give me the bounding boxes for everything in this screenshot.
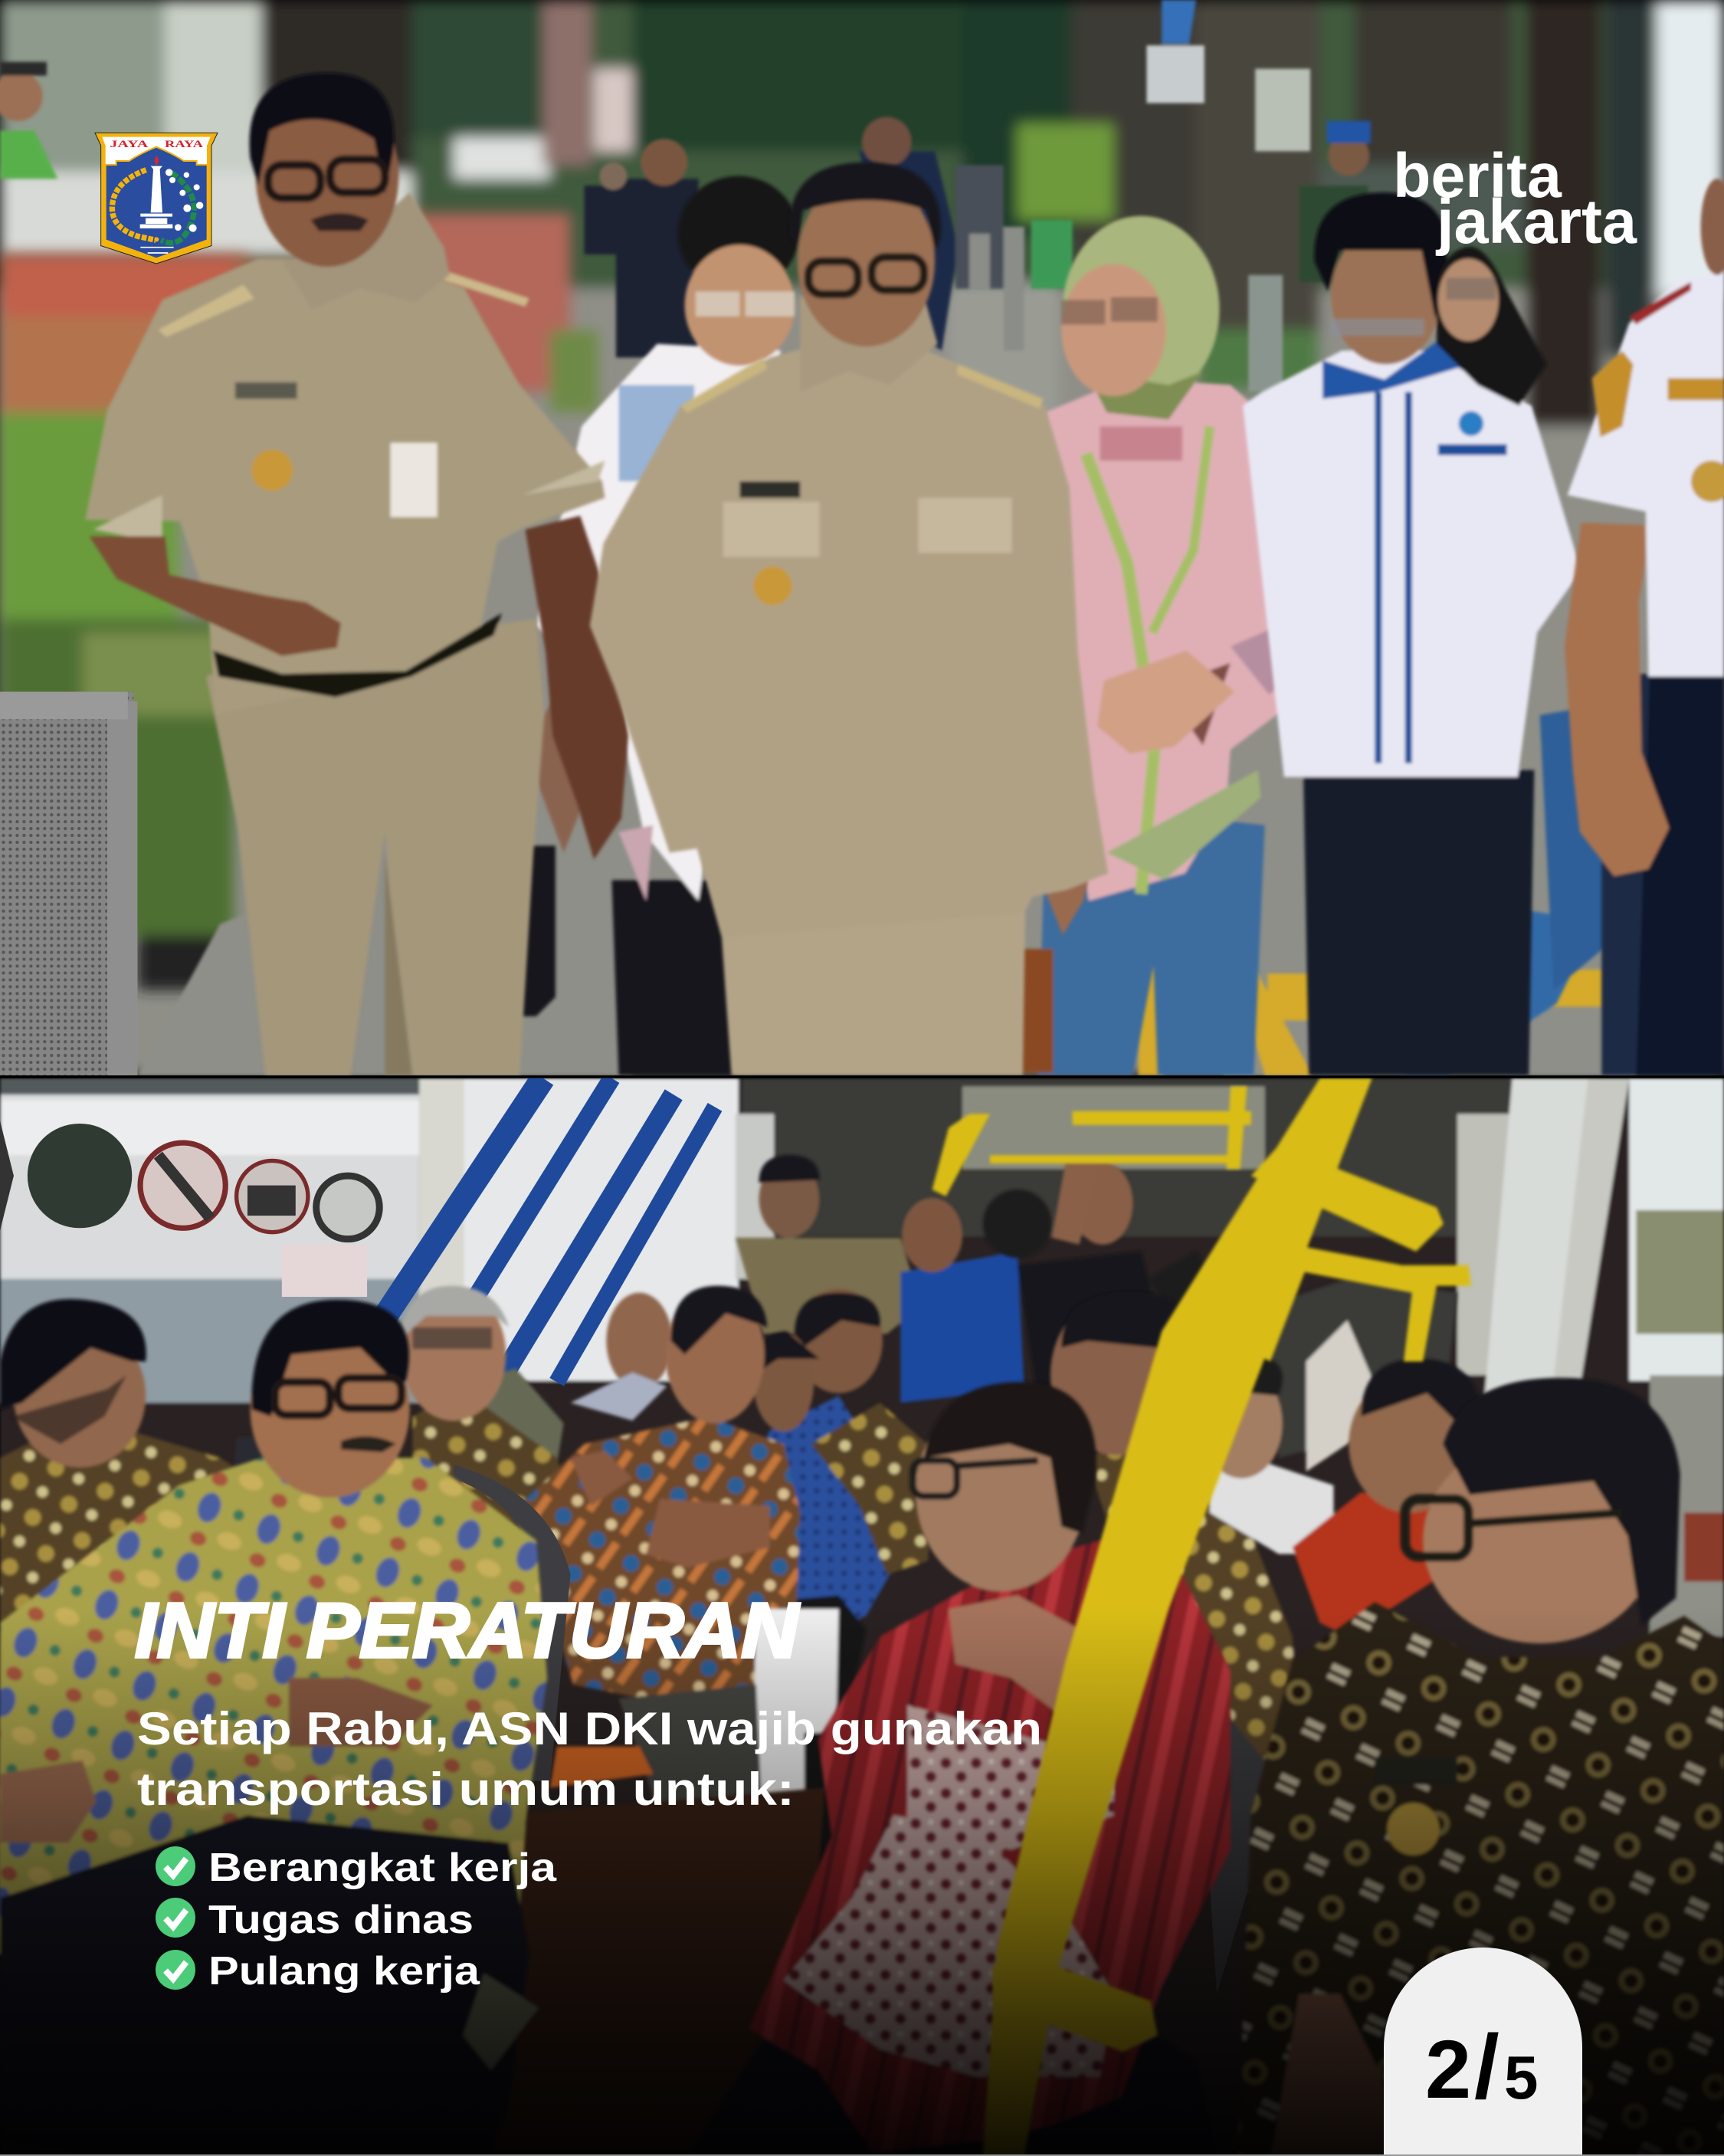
item: berangkat kerja: Berangkat kerja — [208, 1846, 557, 1890]
shield white top — [102, 137, 211, 173]
man in dark batik, right — [1237, 1378, 1724, 2156]
item: tugas dinas: Tugas dinas — [208, 1898, 474, 1942]
logo: berita jakarta wordmark: jakarta — [1435, 187, 1637, 257]
tactile yellow paving — [1136, 967, 1603, 1076]
logo: Jakarta coat of arms: RAYA — [165, 139, 204, 149]
background: hedge — [0, 213, 598, 990]
checklist — [156, 1846, 557, 1994]
page counter badge: 2 — [1425, 2023, 1471, 2115]
page counter badge — [1384, 1948, 1582, 2154]
bottom dark shade — [0, 1609, 1724, 2156]
blue diagonal window stripes — [378, 1078, 715, 1389]
monument — [140, 156, 172, 228]
man in white shirt — [1243, 192, 1581, 1075]
shield blue field — [106, 147, 208, 258]
man 1 in khaki uniform, left — [85, 73, 628, 1075]
woman in pink kebaya — [1012, 216, 1636, 1075]
pavement — [138, 916, 1637, 1076]
speaker box — [0, 692, 137, 1075]
prohibition pictograms — [0, 1121, 379, 1297]
yellow pole — [932, 1078, 1471, 2156]
intro text — [137, 1703, 1042, 1815]
panel: bottom photo inside the bus — [0, 1078, 1724, 2156]
bus seats — [454, 1465, 571, 1781]
batik passenger, center — [518, 1286, 935, 2076]
background: street and trees — [0, 0, 1724, 1075]
heading: INTI PERATURAN — [135, 1588, 800, 1674]
logo: berita jakarta wordmark: berita — [1393, 141, 1562, 211]
rice wreath — [112, 170, 156, 240]
background figures — [0, 0, 1371, 392]
woman in white blouse — [519, 176, 798, 1075]
logo: berita jakarta wordmark — [1393, 141, 1637, 257]
man in red shirt — [687, 1382, 1231, 2156]
motto: JAYA — [110, 139, 149, 149]
officer on the right — [1565, 179, 1724, 1075]
bus interior background — [0, 1078, 1724, 2156]
cotton wreath — [161, 172, 194, 243]
item: pulang kerja: Pulang kerja — [208, 1949, 480, 1994]
floor — [344, 1788, 825, 2156]
man 2 in khaki uniform, center — [590, 162, 1108, 1075]
seated and standing passengers in the back — [0, 1155, 1457, 1623]
panel: top photo of officials walking — [0, 0, 1724, 1075]
passengers behind the red-shirt man — [1050, 1293, 1482, 1761]
page counter badge: / — [1474, 2017, 1499, 2118]
shield outline — [95, 133, 218, 264]
logo: Jakarta coat of arms — [95, 133, 218, 264]
big man in yellow batik — [0, 1300, 547, 2156]
intro text: Setiap Rabu, ASN DKI wajib gunakan — [137, 1703, 1042, 1754]
intro text: transportasi umum untuk: — [137, 1764, 795, 1815]
page counter badge: 5 — [1504, 2043, 1539, 2112]
